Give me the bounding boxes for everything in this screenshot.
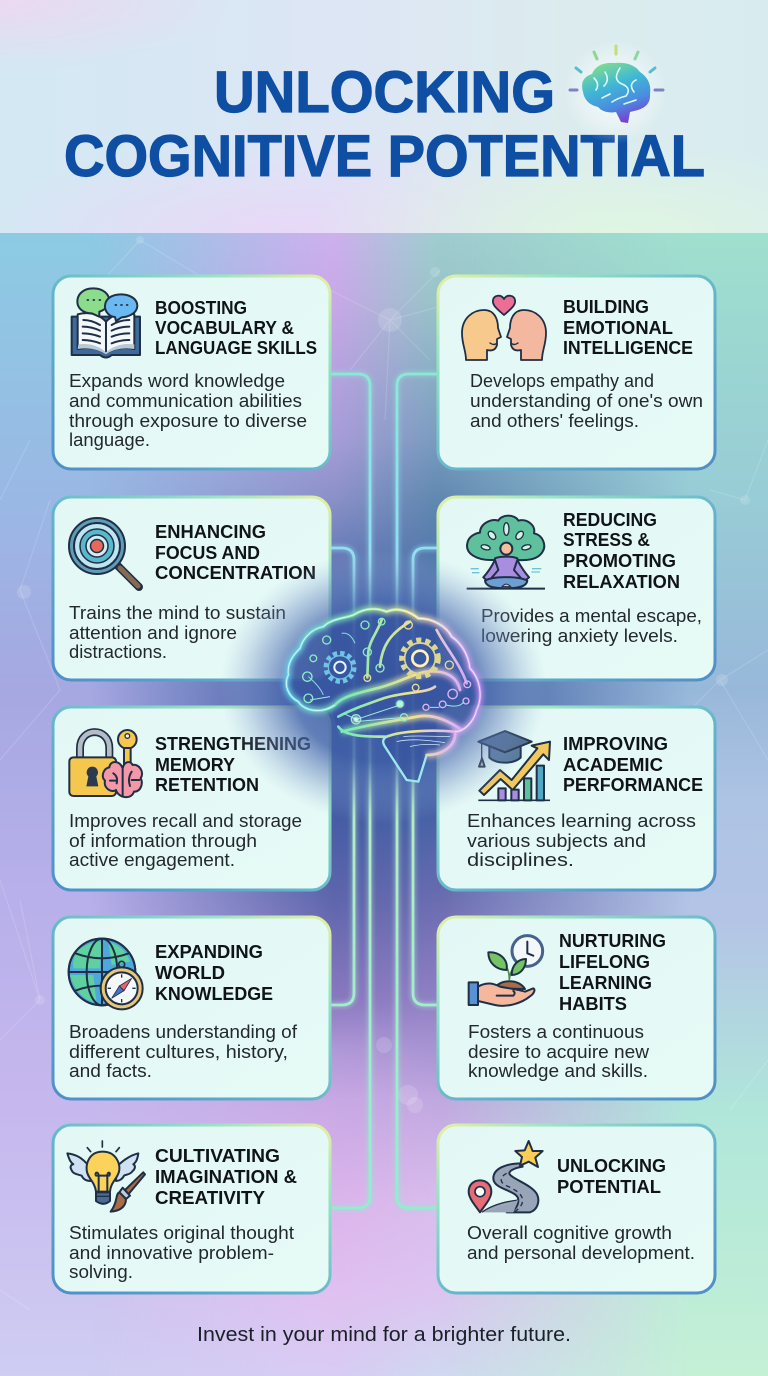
body text: Fosters a continuous [468, 1022, 644, 1042]
body text [69, 371, 307, 450]
heading: UNLOCKING [557, 1155, 666, 1176]
icon: left gear [326, 653, 354, 681]
icon: winged light bulb and paintbrush [67, 1141, 145, 1212]
panel: unlocking potential [438, 1125, 715, 1293]
icon: right gear [402, 640, 438, 676]
heading [155, 297, 317, 358]
panel: focus [53, 497, 330, 680]
heading [155, 521, 316, 583]
icon: open book with speech bubbles [72, 288, 140, 357]
body text: distractions. [69, 642, 167, 662]
title: UNLOCKING [214, 60, 555, 125]
body text: Enhances learning across [467, 811, 696, 831]
heading: POTENTIAL [557, 1176, 661, 1197]
panel: vocabulary [53, 276, 330, 469]
body text: Trains the mind to sustain [69, 603, 286, 623]
body text: desire to acquire new [468, 1042, 650, 1062]
heading: IMPROVING [563, 733, 668, 754]
card background [438, 917, 715, 1099]
body text: solving. [69, 1262, 133, 1282]
body text: language. [69, 430, 150, 450]
panel: emotional intelligence [438, 276, 715, 469]
body text: Provides a mental escape, [481, 606, 702, 626]
body text: and communication abilities [69, 391, 302, 411]
icon: padlock, key and brain [69, 730, 142, 797]
body text: and innovative problem- [69, 1243, 274, 1263]
card background [438, 1125, 715, 1293]
body text: Broadens understanding of [69, 1022, 298, 1042]
body text: disciplines. [467, 850, 574, 870]
heading [155, 733, 311, 795]
heading: WORLD [155, 962, 225, 983]
body text: Overall cognitive growth [467, 1223, 672, 1243]
heading: LEARNING [559, 972, 652, 993]
panel: world knowledge [53, 917, 330, 1099]
card background [53, 707, 330, 890]
heading [557, 1155, 666, 1197]
body text: and personal development. [467, 1243, 695, 1263]
title [64, 60, 705, 189]
body text: and facts. [69, 1061, 152, 1081]
card background [438, 707, 715, 890]
card background [438, 276, 715, 469]
brain stem [383, 737, 427, 782]
card background [53, 1125, 330, 1293]
heading: EMOTIONAL [563, 317, 673, 338]
heading: RETENTION [155, 774, 259, 795]
body text [481, 606, 702, 646]
card background [438, 497, 715, 680]
title: COGNITIVE POTENTIAL [64, 124, 705, 189]
body text [69, 1223, 294, 1282]
body text: Develops empathy and [470, 371, 654, 391]
heading: NURTURING [559, 930, 666, 951]
body text [468, 1022, 650, 1081]
icon: meditating person under tree [467, 516, 545, 589]
heading: STRESS & [563, 529, 650, 550]
heading [563, 296, 693, 358]
panel: lifelong learning [438, 917, 715, 1099]
icon: globe and compass [69, 939, 143, 1009]
heading [563, 733, 703, 795]
panel: stress [438, 497, 715, 680]
panel: memory [53, 707, 330, 890]
heading: ENHANCING [155, 521, 266, 542]
body text: and others' feelings. [470, 411, 639, 431]
heading [155, 941, 273, 1004]
heading: BUILDING [563, 296, 649, 317]
body text: Expands word knowledge [69, 371, 285, 391]
body text: different cultures, history, [69, 1042, 288, 1062]
icon: title brain with rays [564, 40, 668, 144]
body text [69, 811, 302, 870]
central glowing brain [220, 550, 547, 823]
heading: ACADEMIC [563, 754, 663, 775]
body text: active engagement. [69, 850, 235, 870]
body text: of information through [69, 831, 257, 851]
heading: INTELLIGENCE [563, 337, 693, 358]
body text: understanding of one's own [470, 391, 703, 411]
body text: attention and ignore [69, 623, 237, 643]
heading [563, 509, 680, 592]
heading: CONCENTRATION [155, 562, 316, 583]
heading: PERFORMANCE [563, 774, 703, 795]
heading: LANGUAGE SKILLS [155, 337, 317, 358]
icon: hand holding seedling with clock [469, 936, 543, 1006]
heading: CULTIVATING [155, 1145, 280, 1166]
body text [69, 1022, 298, 1081]
heading: BOOSTING [155, 297, 247, 318]
body text [467, 811, 696, 870]
body text: through exposure to diverse [69, 411, 307, 431]
icon: magnifier target [69, 518, 139, 587]
body text: Stimulates original thought [69, 1223, 294, 1243]
heading: PROMOTING [563, 550, 676, 571]
heading: RELAXATION [563, 571, 680, 592]
card background [53, 497, 330, 680]
body text: knowledge and skills. [468, 1061, 648, 1081]
heading: IMAGINATION & [155, 1166, 297, 1187]
heading: CREATIVITY [155, 1187, 266, 1208]
card background [53, 917, 330, 1099]
connector lines [330, 374, 438, 1208]
heading: STRENGTHENING [155, 733, 311, 754]
icon: graduation cap and growth chart [478, 731, 550, 800]
heading: EXPANDING [155, 941, 263, 962]
body text [69, 603, 286, 662]
heading: KNOWLEDGE [155, 983, 273, 1004]
heading: REDUCING [563, 509, 657, 530]
heading [155, 1145, 297, 1208]
heading [559, 930, 666, 1014]
heading: FOCUS AND [155, 542, 260, 563]
body text: Improves recall and storage [69, 811, 302, 831]
icon: winding road to star with pin [469, 1141, 543, 1212]
body text [470, 371, 703, 431]
body text [467, 1223, 695, 1263]
header background [0, 0, 768, 234]
heading: LIFELONG [559, 951, 650, 972]
panel: academic [438, 707, 715, 890]
icon: two faces and heart [462, 296, 546, 360]
heading: VOCABULARY & [155, 317, 294, 338]
footer tagline: Invest in your mind for a brighter future. [197, 1324, 571, 1346]
panel: imagination [53, 1125, 330, 1293]
heading: MEMORY [155, 754, 236, 775]
card background [53, 276, 330, 469]
heading: HABITS [559, 993, 627, 1014]
body text: lowering anxiety levels. [481, 626, 678, 646]
body text: various subjects and [467, 831, 646, 851]
